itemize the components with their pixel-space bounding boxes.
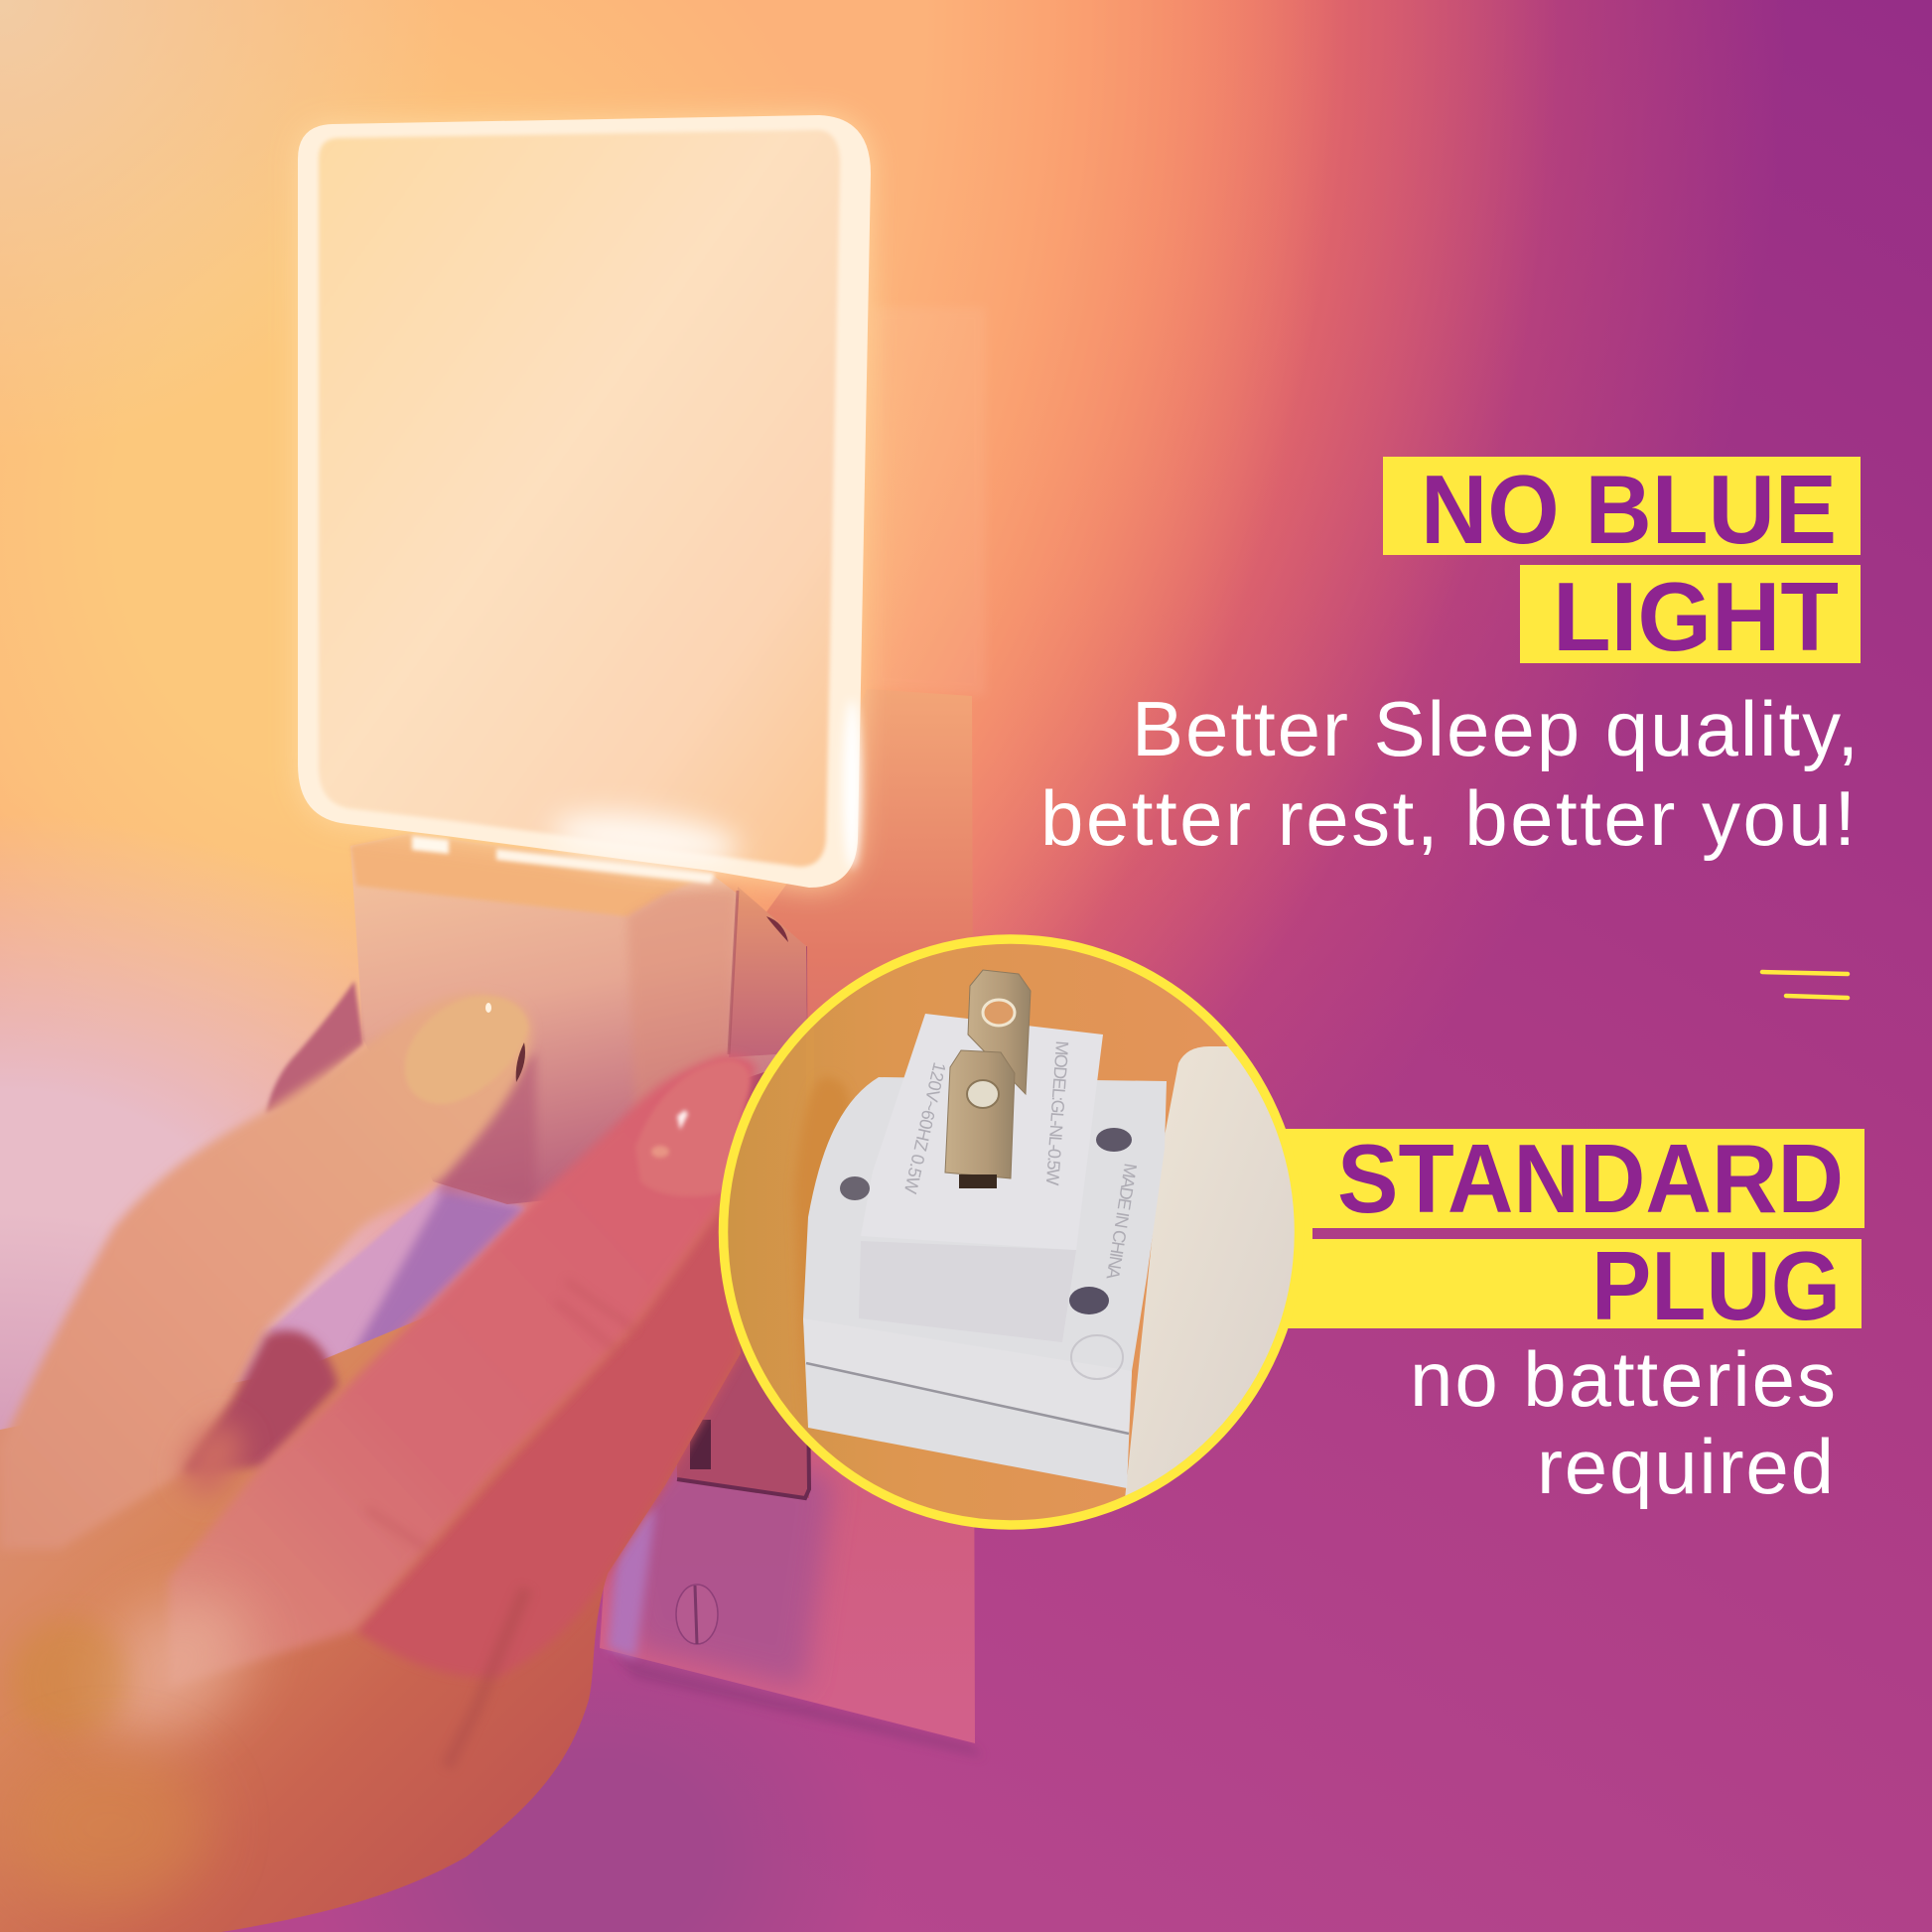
wall plate	[600, 689, 983, 1757]
rear pin	[968, 970, 1031, 1094]
index nail	[405, 996, 528, 1104]
middle finger	[169, 1055, 756, 1688]
front pin	[945, 1050, 1015, 1188]
wall gap between fingers	[268, 1181, 526, 1390]
circular plug inset: 120V~60HZ 0.5W	[900, 1060, 950, 1195]
bright knuckle patch	[62, 1566, 276, 1770]
subtext: better sleep: Better Sleep quality,	[1132, 685, 1859, 772]
plug back plate	[803, 1077, 1167, 1488]
circular plug inset	[719, 935, 1305, 1531]
highlight bar: standard	[1281, 1129, 1864, 1228]
moulded text: MODEL:GL-NL-0.5W	[1042, 1040, 1072, 1186]
shaded thumb	[184, 1330, 339, 1472]
certification mark	[1071, 1335, 1123, 1379]
ghost finger	[796, 1078, 850, 1346]
hand	[0, 981, 756, 1932]
lamp panel	[1125, 1046, 1295, 1496]
middle finger nail	[635, 1060, 750, 1196]
screw	[676, 1585, 718, 1644]
subtext: no batteries: required	[1537, 1423, 1834, 1510]
subtext: better sleep	[1040, 685, 1859, 862]
subtext: no batteries	[1410, 1335, 1836, 1510]
heading line 2: PLUG	[1591, 1231, 1841, 1340]
finger creases	[367, 1281, 635, 1549]
palm and lower finger	[0, 1191, 741, 1932]
subtext: better sleep: better rest, better you!	[1040, 774, 1856, 862]
ring finger shading	[354, 1195, 741, 1678]
plug body side	[627, 887, 738, 1122]
decorative yellow dashes	[1762, 972, 1848, 998]
finger behind	[266, 981, 363, 1114]
plug bottom step	[803, 1318, 1132, 1421]
raised block front	[859, 1241, 1076, 1342]
heading line 1: NO BLUE	[1421, 455, 1837, 564]
highlight bar: light	[1520, 565, 1861, 663]
highlight bar: plug	[1281, 1239, 1862, 1328]
heading: standard plug	[1281, 1124, 1864, 1340]
heading: no blue light	[1383, 455, 1861, 671]
glowing acrylic panel	[298, 115, 871, 888]
heading line 2: LIGHT	[1553, 562, 1839, 671]
wall outlet cover	[675, 946, 809, 1498]
mounting screws	[1096, 1128, 1132, 1152]
highlight bar: no blue	[1383, 457, 1861, 555]
index finger	[0, 993, 532, 1549]
plug body top face	[350, 834, 711, 916]
subtext: no batteries: no batteries	[1410, 1335, 1836, 1423]
circular plug inset: MADE IN CHINA	[1103, 1162, 1141, 1281]
raised block top	[903, 1014, 1103, 1080]
night light plug body	[350, 834, 807, 1204]
yellow ring	[723, 939, 1299, 1525]
panel bright glow at bottom	[549, 805, 742, 873]
heading line 1: STANDARD	[1337, 1124, 1844, 1233]
